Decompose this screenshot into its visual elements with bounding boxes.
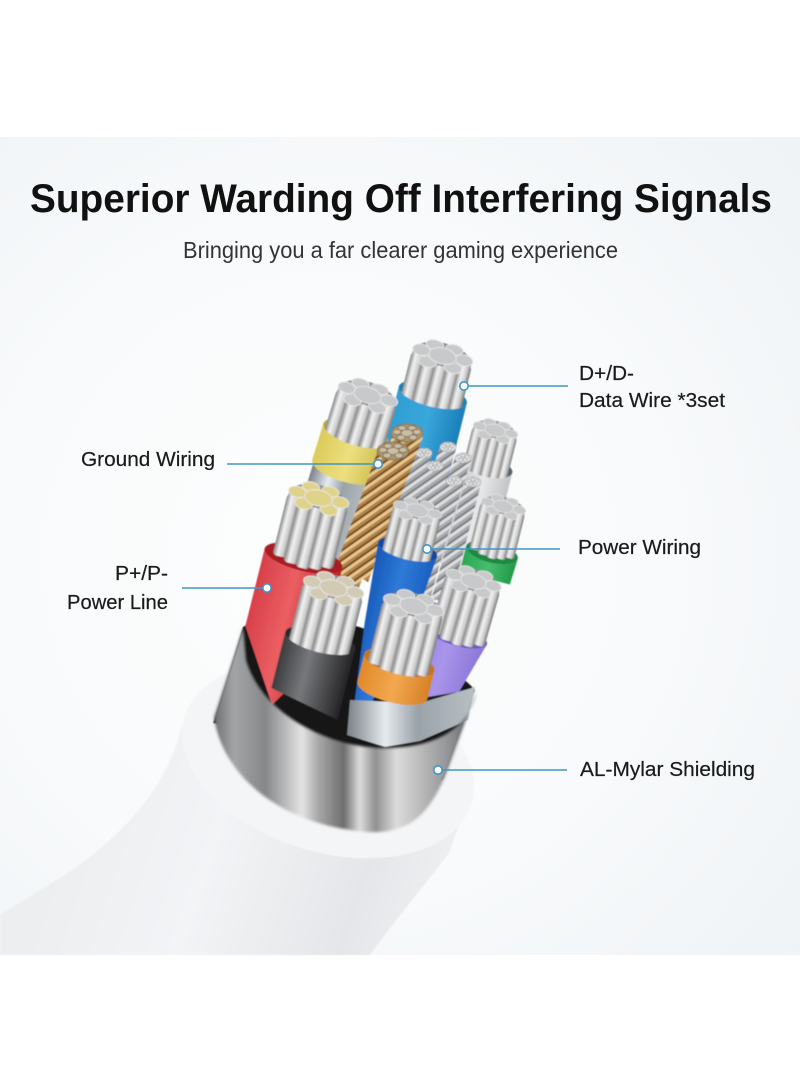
label: Ground Wiring: Ground Wiring xyxy=(81,449,215,471)
panel: background xyxy=(0,137,800,955)
label: D+/D- Data Wire *3set: Data Wire *3set xyxy=(579,390,725,412)
cable white outer jacket xyxy=(0,700,474,955)
wire: blue data wire xyxy=(379,334,480,483)
label: D+/D- Data Wire *3set xyxy=(579,363,725,412)
AL-Mylar shielding band xyxy=(214,627,476,832)
leader: D+/D- data wire xyxy=(460,382,568,390)
wire: blue power wire xyxy=(332,492,450,741)
subtitle: Bringing you a far clearer gaming experience xyxy=(183,237,618,263)
label: Power Wiring: Power Wiring xyxy=(578,537,701,559)
foil interior shadow xyxy=(213,615,475,780)
wire: green data wire xyxy=(460,490,532,585)
wire: yellow ground wire xyxy=(285,372,404,570)
cable illustration xyxy=(0,334,532,955)
wire: twisted silver strands xyxy=(378,442,481,600)
label: D+/D- Data Wire *3set: D+/D- xyxy=(579,363,634,385)
leader: power wiring xyxy=(423,545,560,553)
leader: ground wiring xyxy=(227,460,382,468)
wire: red power line xyxy=(228,475,363,714)
label: AL-Mylar Shielding: AL-Mylar Shielding xyxy=(580,759,755,781)
label: P+/P- Power Line xyxy=(67,563,168,614)
label: P+/P- Power Line: Power Line xyxy=(67,592,168,614)
wire: black sheath xyxy=(268,566,372,720)
jacket end cap xyxy=(158,628,498,892)
wire: purple sheath xyxy=(391,556,506,724)
title: Superior Warding Off Interfering Signals xyxy=(30,177,772,221)
inner foil strip xyxy=(347,687,475,747)
label: P+/P- Power Line: P+/P- xyxy=(115,563,168,585)
leader: AL-Mylar shielding xyxy=(434,766,567,774)
wire: grey data wire xyxy=(435,414,524,575)
wire: twisted gold strands xyxy=(338,424,423,596)
wire: orange sheath xyxy=(355,584,452,711)
leader: P+/P- power line xyxy=(182,584,271,592)
